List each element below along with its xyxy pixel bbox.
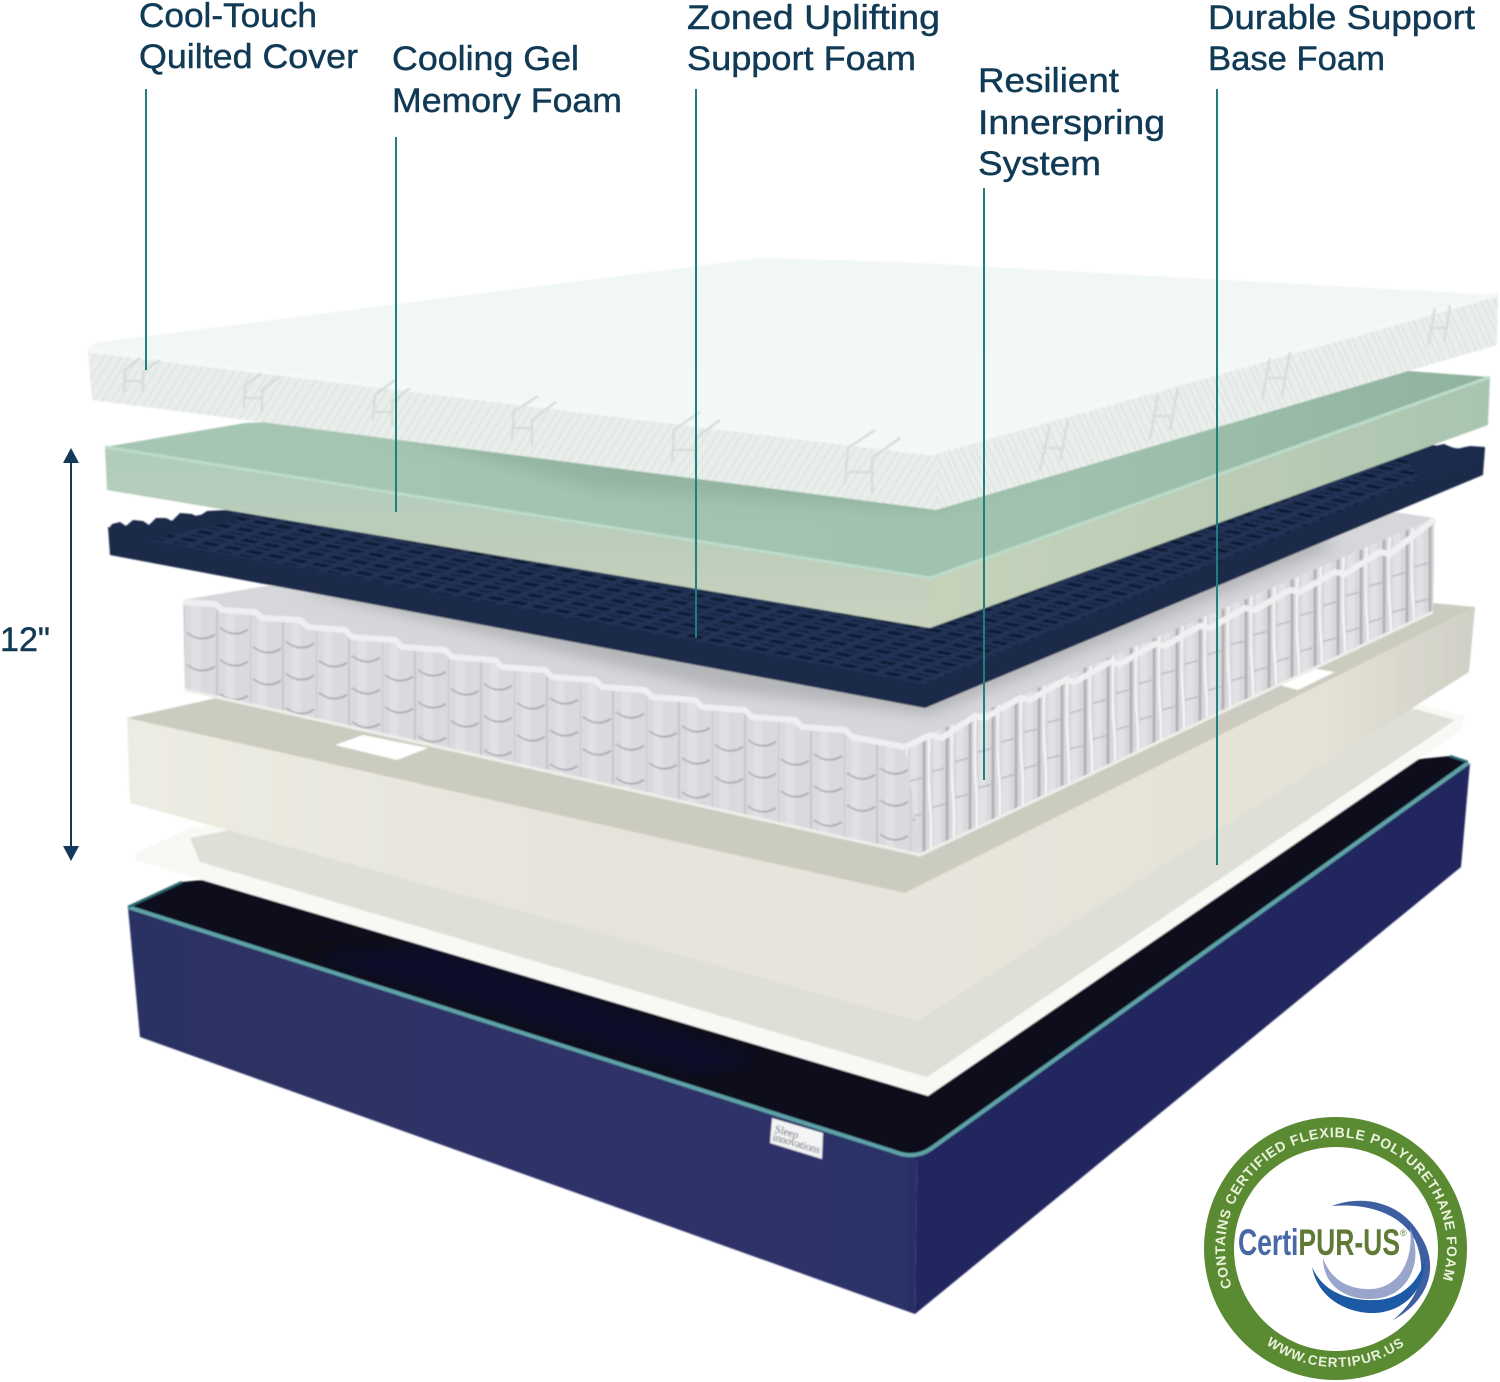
label: durable support base foam: Durable Support [1208, 0, 1476, 37]
label: resilient innerspring system: Innerspring [978, 104, 1165, 142]
label: resilient innerspring system: System [978, 145, 1101, 183]
layer: quilted cover [88, 258, 1498, 510]
badge ring text bottom: WWW.CERTIPUR.US [1268, 1336, 1404, 1367]
label: zoned uplifting support foam [687, 0, 940, 78]
layer: navy base cover [128, 756, 1470, 1314]
layer: white bottom foam [135, 700, 1465, 1096]
label tag: sleep innovations: innovations [771, 1131, 822, 1156]
label: cooling gel memory foam [392, 40, 622, 120]
label: resilient innerspring system: Resilient [978, 62, 1120, 100]
badge ring text top: CONTAINS CERTIFIED FLEXIBLE POLYURETHANE FOAM [1215, 1128, 1457, 1288]
callout line: zoned foam [695, 89, 697, 638]
label: resilient innerspring system [978, 62, 1165, 183]
layer: cream support foam [127, 600, 1475, 1021]
mattress exploded layers [88, 258, 1498, 1314]
callout line: innerspring [983, 188, 985, 780]
label: zoned uplifting support foam: Support Foam [687, 40, 916, 78]
callout line: cool-touch cover [145, 89, 147, 370]
label: cooling gel memory foam: Memory Foam [392, 82, 622, 120]
layer: navy zoned foam [108, 440, 1485, 708]
callout line: base foam [1216, 89, 1218, 865]
label: cool-touch quilted cover: Quilted Cover [139, 38, 358, 76]
badge wordmark: CertiPUR-US [1238, 1222, 1400, 1263]
layer: green cooling gel foam [105, 370, 1490, 628]
label: zoned uplifting support foam: Zoned Uplifting [687, 0, 940, 37]
gap: white opening left [335, 735, 428, 760]
label: durable support base foam [1208, 0, 1476, 78]
gap: white opening right [1269, 667, 1335, 690]
label: durable support base foam: Base Foam [1208, 40, 1385, 78]
label: cooling gel memory foam: Cooling Gel [392, 40, 579, 78]
height label: 12" [0, 621, 50, 659]
label: cool-touch quilted cover [139, 0, 358, 76]
quilting stitches [124, 305, 1450, 494]
badge swooshes [1312, 1201, 1430, 1320]
layer: pocket innerspring [183, 510, 1435, 855]
label tag: sleep innovations: Sleep [773, 1123, 800, 1142]
badge registered mark: ® [1400, 1228, 1407, 1238]
callout line: cooling gel [395, 137, 397, 512]
foam peaks edge right [1395, 440, 1485, 480]
foam peaks edge left [108, 510, 240, 545]
height dimension arrow [63, 448, 79, 861]
label tag: sleep innovations [770, 1118, 823, 1159]
badge: CertiPUR-US [1204, 1117, 1467, 1380]
